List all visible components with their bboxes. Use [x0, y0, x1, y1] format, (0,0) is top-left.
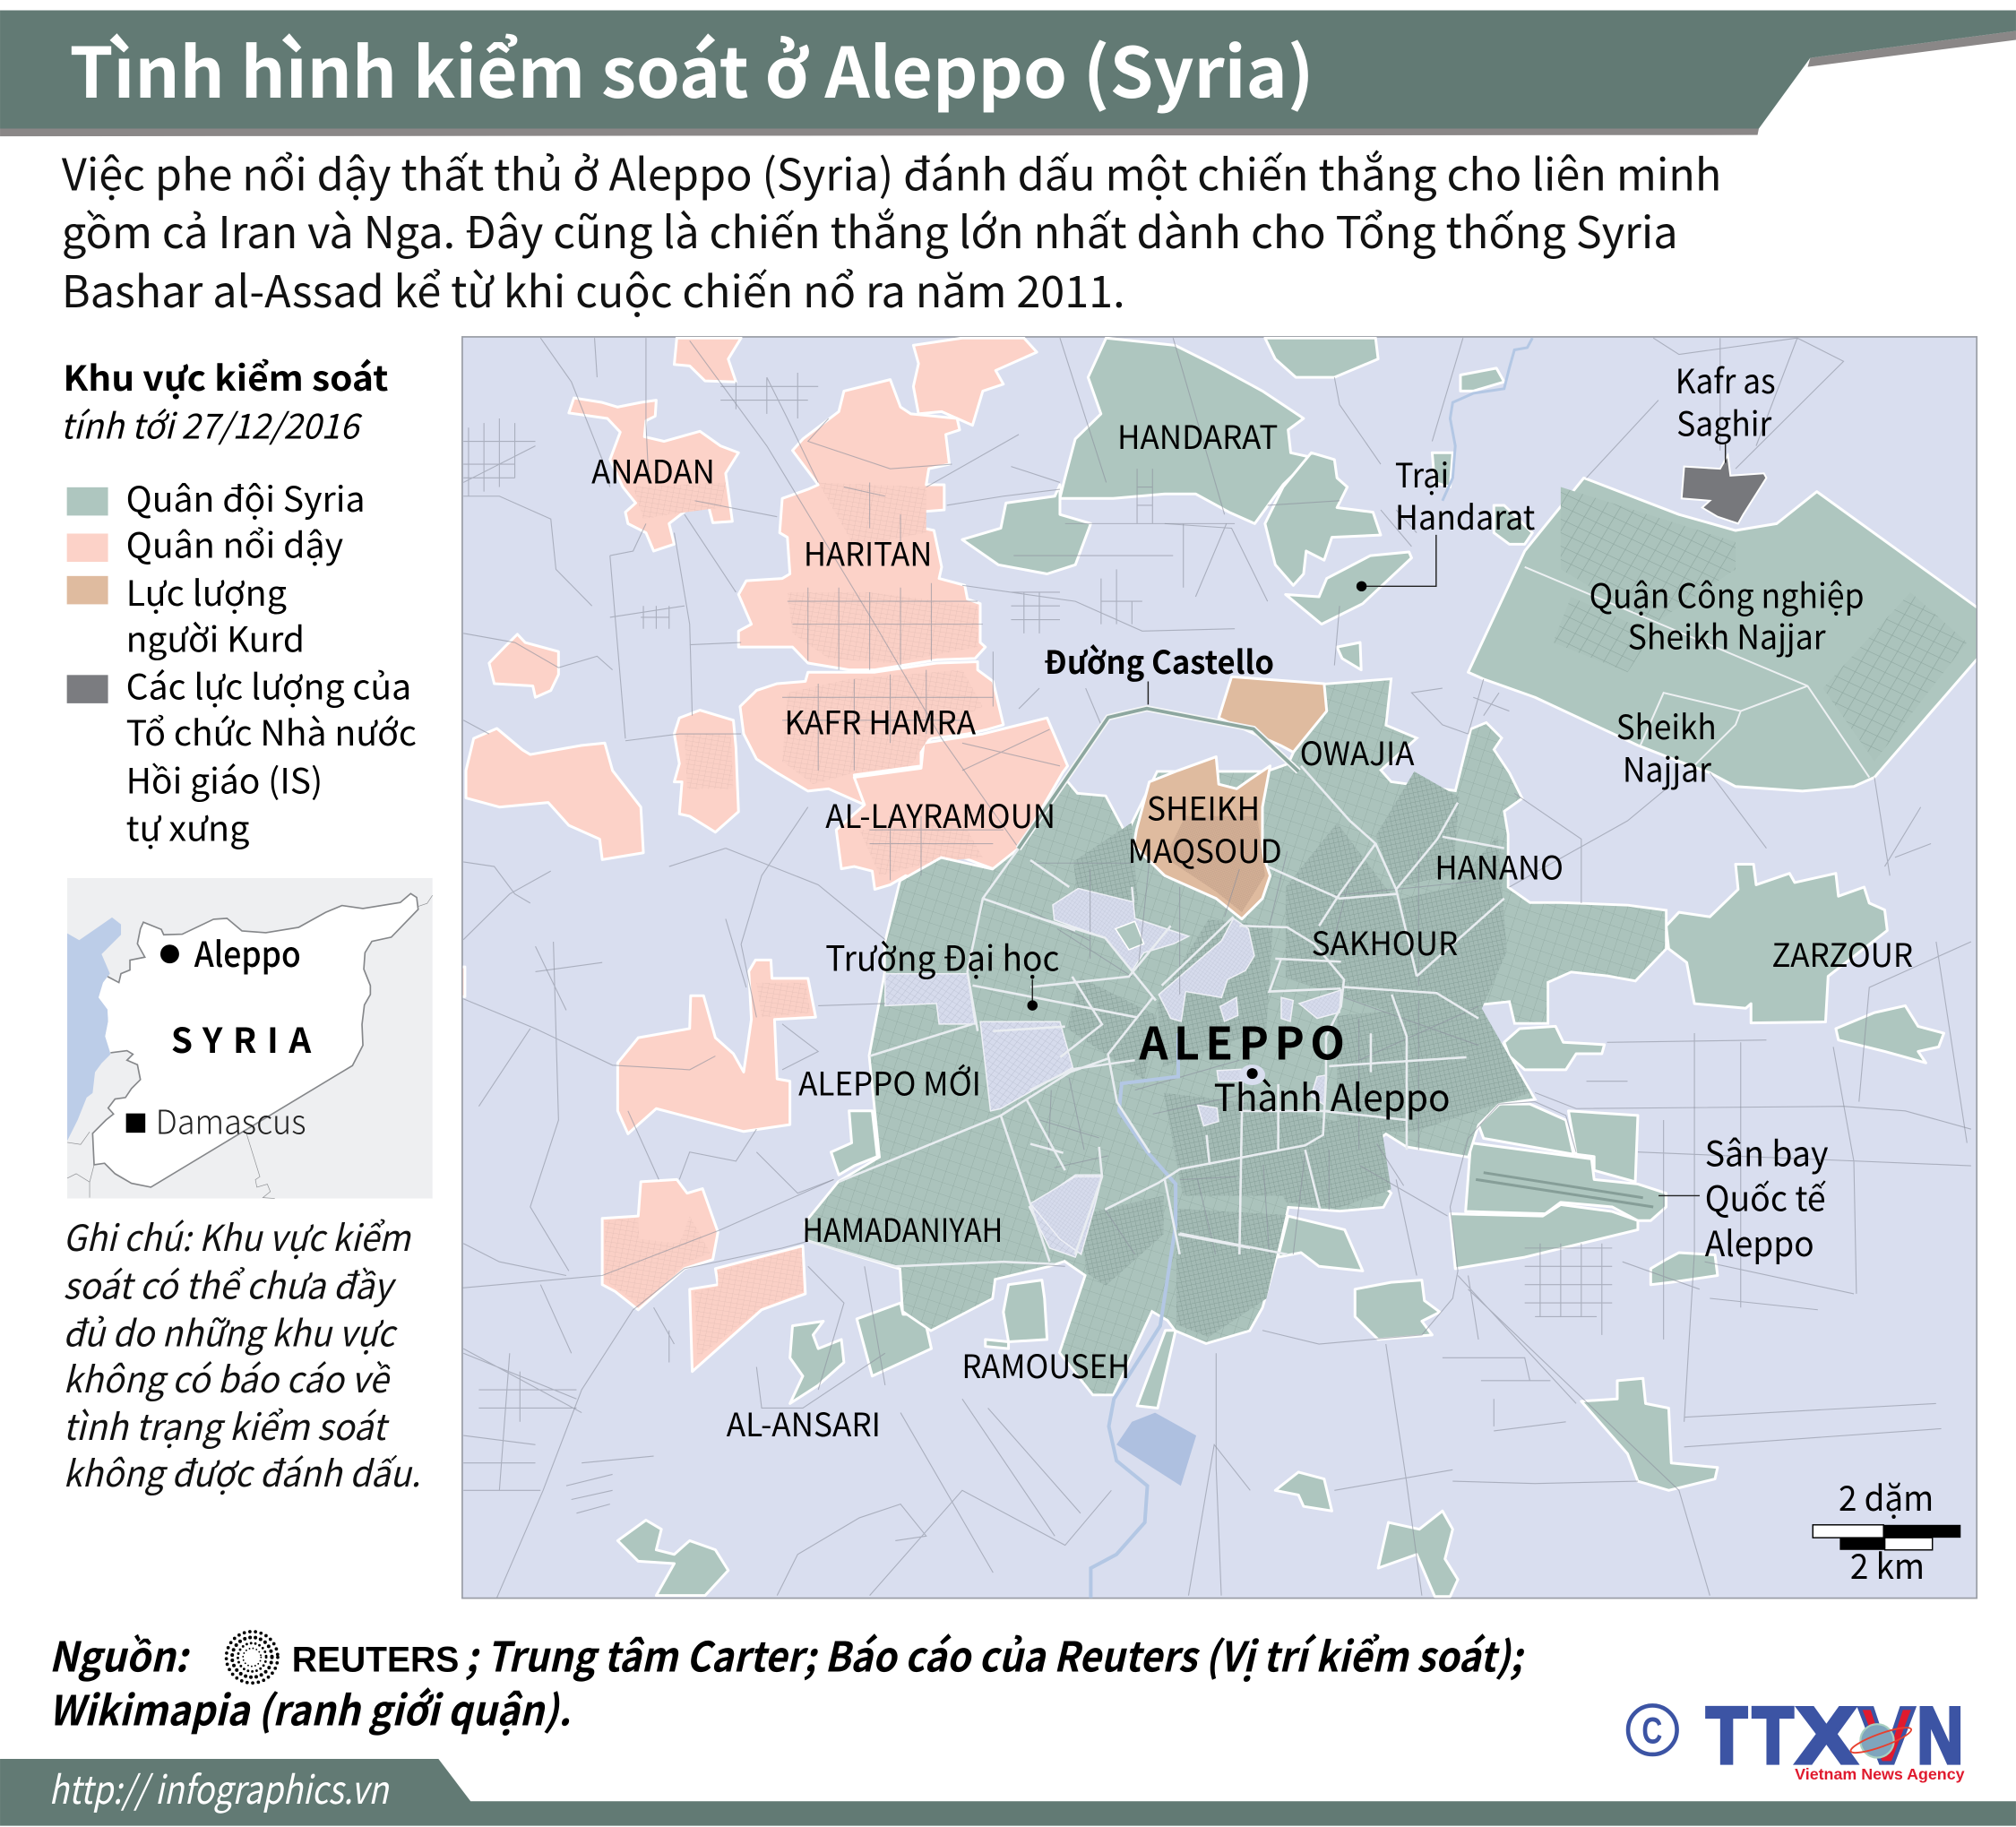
legend swatch: rebels: [67, 533, 108, 562]
label: ALEPPO city: ALEPPO: [1138, 1008, 1345, 1073]
label: Handarat camp with leader: Handarat: [1395, 491, 1535, 539]
map labels: OWAJIA: [1300, 728, 1415, 775]
map labels: KAFR HAMRA: [784, 697, 976, 744]
footer url: http:// infographics.vn: [49, 1760, 390, 1815]
legend label: Kurdish forces: người Kurd: [126, 612, 305, 662]
dense street districts: [1067, 771, 1530, 1337]
label: Sheikh Najjar industrial district: Quận Công nghiệp: [1590, 570, 1865, 618]
legend swatch: IS: [67, 675, 108, 703]
map labels: AL-ANSARI: [727, 1400, 881, 1446]
map labels: MAQSOUD: [1127, 826, 1282, 873]
Castello road: [1018, 709, 1298, 849]
main map: [448, 337, 1987, 1599]
scale bar: 2 km: [1850, 1539, 1925, 1590]
label: Sheikh Najjar industrial district: Sheikh Najjar: [1628, 611, 1826, 659]
map labels: SAKHOUR: [1312, 918, 1458, 965]
header banner: [0, 10, 2016, 136]
major city boulevards: [808, 766, 1504, 1266]
agency name: Vietnam News Agency: [1795, 1765, 1965, 1783]
legend heading: Khu vực kiểm soát: [63, 351, 388, 401]
label: Aleppo international airport with leader: Quốc tế: [1705, 1172, 1826, 1222]
copyright mark: C: [1641, 1710, 1662, 1752]
label: Kafr as Saghir with leader: Saghir: [1676, 397, 1772, 445]
water: river Quweiq: [1090, 338, 1532, 1598]
map labels: HANDARAT: [1117, 412, 1278, 459]
label: Kafr as Saghir with leader: [1676, 355, 1776, 463]
label: Handarat camp with leader: [1357, 449, 1535, 591]
intro text: gồm cả Iran và Nga. Đây cũng là chiến thắng lớn nhất dành cho Tổng thống Syria: [62, 198, 1678, 262]
map labels: HAMADANIYAH: [802, 1205, 1003, 1252]
map labels: SHEIKH: [1147, 783, 1260, 830]
map labels: ZARZOUR: [1771, 930, 1913, 977]
Syrian-army areas outside the city: [617, 338, 1987, 1597]
wordmark TTXVN: [1706, 1690, 1963, 1780]
note text: không được đánh dấu.: [63, 1444, 420, 1497]
label: university with marker: [825, 931, 1059, 1011]
note text: Ghi chú: Khu vực kiểm: [63, 1209, 411, 1262]
note text: [63, 1209, 420, 1497]
source line: [49, 1624, 1525, 1738]
rural and city road network: [448, 338, 1971, 1598]
note text: soát có thể chưa đầy: [63, 1256, 397, 1309]
legend: [60, 351, 417, 851]
TTXVN logo: [1628, 1690, 1965, 1783]
intro text: Việc phe nổi dậy thất thủ ở Aleppo (Syria) đánh dấu một chiến thắng cho liên minh: [62, 140, 1721, 203]
legend label: Kurdish forces: Lực lượng: [126, 566, 287, 616]
wordmark TTXVN: T: [1706, 1690, 1747, 1780]
footer band: [0, 1759, 2016, 1826]
Kurdish-held areas: [1133, 677, 1327, 919]
wordmark TTXVN: T: [1753, 1690, 1794, 1780]
globe: [1848, 1723, 1913, 1758]
wordmark TTXVN: V: [1859, 1690, 1915, 1780]
intro text: Bashar al-Assad kể từ khi cuộc chiến nổ ra năm 2011.: [62, 257, 1125, 321]
rebel-held areas: [455, 338, 1068, 1372]
source line: ; Trung tâm Carter; Báo cáo của Reuters (Vị trí kiểm soát);: [465, 1624, 1525, 1684]
rebel street texture: [605, 983, 811, 1357]
airport runways: [1476, 1173, 1653, 1207]
note text: không có báo cáo về: [63, 1350, 392, 1403]
icon: Reuters logo: [227, 1632, 278, 1683]
legend label: IS: [126, 660, 417, 851]
legend label: IS: Hồi giáo (IS): [126, 754, 323, 804]
label: Castello road with leader: Đường Castello: [1044, 637, 1274, 684]
label: Kafr as Saghir with leader: Kafr as: [1676, 355, 1776, 403]
label: Aleppo international airport with leader: Aleppo: [1705, 1217, 1814, 1267]
legend swatch: Kurdish forces: [67, 576, 108, 604]
note text: đủ do những khu vực: [63, 1304, 398, 1357]
industrial district street grids: [1525, 487, 1967, 778]
label: Sheikh Najjar: Sheikh: [1616, 701, 1717, 749]
inset: country name: SYRIA: [171, 1013, 311, 1064]
copyright mark: [1628, 1705, 1677, 1754]
legend date: tính tới 27/12/2016: [60, 399, 363, 449]
IS-held area: Kafr as Saghir: [1682, 455, 1766, 523]
scale bar: 2 dặm: [1839, 1471, 1934, 1521]
note text: tình trạng kiểm soát: [63, 1398, 390, 1451]
map labels: AL-LAYRAMOUN: [825, 791, 1055, 838]
scale bar: [1813, 1471, 1960, 1590]
legend label: Syrian army: Quân đội Syria: [126, 472, 366, 522]
legend label: rebels: Quân nổi dậy: [126, 519, 343, 569]
non-army districts inside the city: [885, 889, 1341, 1257]
label: Aleppo international airport with leader: [1658, 1126, 1828, 1267]
label: Sheikh Najjar: Najjar: [1623, 743, 1711, 791]
city of Aleppo: army-held urban core: [805, 679, 1667, 1395]
label: university with marker: Trường Đại học: [825, 931, 1059, 981]
label: Handarat camp with leader: Trại: [1395, 449, 1449, 497]
inset: Aleppo marker: Aleppo: [194, 927, 301, 978]
legend label: IS: Các lực lượng của: [126, 660, 411, 711]
map labels: RAMOUSEH: [961, 1341, 1130, 1388]
source line: Wikimapia (ranh giới quận).: [49, 1679, 571, 1738]
wordmark TTXVN: X: [1796, 1690, 1857, 1780]
map labels: [591, 412, 1913, 1446]
legend swatch: Syrian army: [67, 487, 108, 515]
legend label: IS: Tổ chức Nhà nước: [126, 706, 417, 756]
label: Aleppo international airport with leader: Sân bay: [1705, 1126, 1828, 1176]
map labels: HANANO: [1434, 842, 1564, 889]
label: citadel with marker: Thành Aleppo: [1214, 1068, 1451, 1122]
wordmark TTXVN: N: [1917, 1690, 1963, 1780]
inset locator map: Syria: [67, 878, 433, 1199]
title: Tình hình kiểm soát ở Aleppo (Syria): [70, 18, 1314, 118]
map labels: ALEPPO MỚI: [798, 1059, 981, 1106]
source line: Nguồn:: [49, 1624, 190, 1684]
label: Sheikh Najjar: [1616, 701, 1717, 791]
inset: Damascus marker: Damascus: [156, 1096, 306, 1144]
label: Sheikh Najjar industrial district: [1590, 570, 1865, 659]
map labels: HARITAN: [804, 529, 932, 575]
legend label: Kurdish forces: [126, 566, 305, 662]
intro text: [62, 140, 1721, 321]
map labels: ANADAN: [591, 447, 715, 494]
legend label: IS: tự xưng: [126, 801, 250, 851]
Reuters wordmark: REUTERS: [292, 1639, 459, 1679]
